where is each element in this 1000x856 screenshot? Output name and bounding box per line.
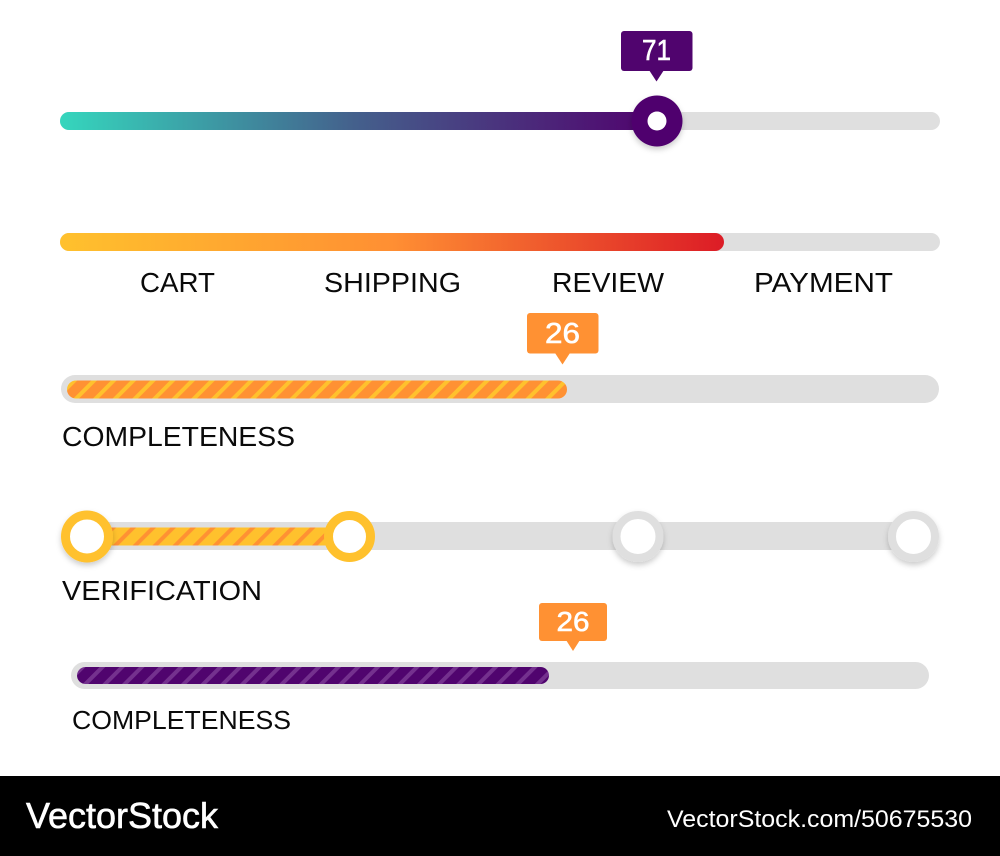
step 3 inactive (616, 515, 660, 558)
slider knob (632, 96, 682, 146)
footer url: VectorStock.com/50675530 (667, 806, 972, 833)
striped fill (100, 528, 340, 546)
slider track (60, 112, 940, 130)
tooltip: 71: 71 (642, 35, 671, 67)
tooltip: 26: 26 (545, 318, 580, 350)
label: VERIFICATION (62, 575, 262, 606)
tooltip: 26 (539, 603, 607, 651)
footer brand: VectorStock (26, 795, 219, 836)
step labels (140, 267, 893, 298)
slider gradient fill (60, 112, 660, 130)
track (61, 375, 939, 403)
completeness bar: purple stripes (71, 603, 929, 735)
label: COMPLETENESS (62, 421, 295, 452)
step labels: PAYMENT (754, 267, 893, 298)
step 1 active (66, 515, 108, 558)
label: COMPLETENESS (72, 705, 291, 735)
step gradient fill (60, 233, 724, 251)
striped fill (67, 380, 567, 398)
track (71, 662, 929, 689)
step 2 active (328, 516, 370, 558)
striped fill (77, 667, 549, 684)
step labels: REVIEW (552, 267, 664, 298)
step labels: SHIPPING (324, 267, 461, 298)
tooltip: 26 (527, 313, 598, 364)
slider with gradient fill and value 71 (60, 31, 940, 146)
tooltip: 71 (621, 31, 692, 82)
step labels: CART (140, 267, 215, 298)
checkout step progress bar (60, 233, 940, 298)
tooltip: 26: 26 (556, 606, 590, 637)
completeness bar: orange stripes (61, 313, 939, 452)
step track (60, 233, 940, 251)
verification stepper (62, 515, 938, 606)
step 4 inactive (892, 515, 935, 558)
track (62, 522, 938, 550)
footer bar (0, 776, 1000, 856)
